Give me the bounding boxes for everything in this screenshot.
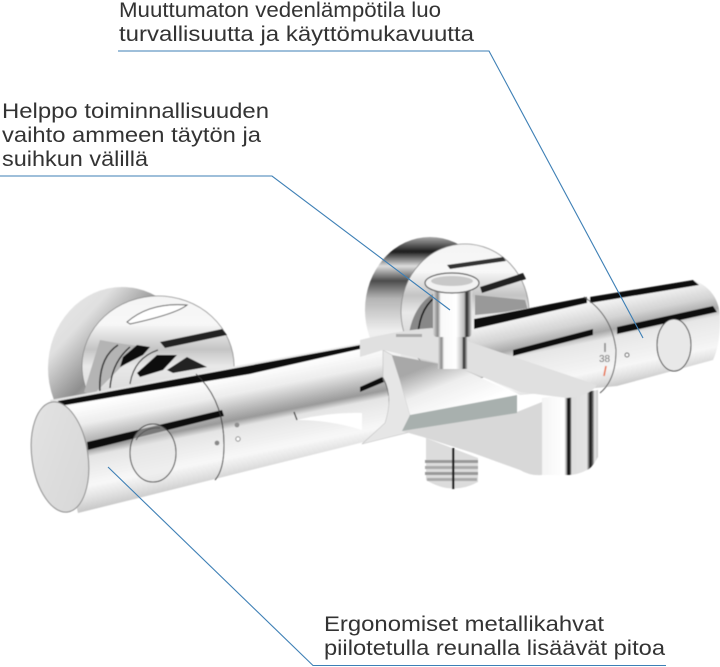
leader line: temperature	[118, 51, 643, 338]
callout text: diverter	[2, 100, 269, 171]
spout body	[362, 350, 598, 475]
callout text: diverter: Helppo toiminnallisuuden	[2, 100, 269, 123]
leader line: diverter	[0, 176, 450, 310]
right wall plate	[365, 237, 529, 383]
metal handle	[657, 319, 691, 371]
dark reflections	[474, 297, 587, 329]
callout text: temperature: turvallisuutta ja käyttömukavuutta	[119, 23, 474, 46]
metal handle	[130, 424, 176, 482]
left wall plate	[48, 287, 234, 449]
spout top surface	[360, 328, 597, 398]
callout text: handles: piilotetulla reunalla lisäävät pitoa	[324, 637, 665, 660]
middle dark reflection	[87, 410, 224, 450]
callout text: handles	[324, 613, 665, 660]
tube end near spout	[360, 377, 390, 423]
spout upper chrome	[392, 355, 518, 415]
diverter stem	[425, 273, 479, 369]
spout grey band	[402, 395, 517, 431]
left thermostat tube	[25, 336, 404, 516]
upper dark reflection	[58, 345, 360, 406]
callout text: temperature	[119, 0, 474, 46]
faucet illustration	[25, 237, 720, 516]
right thermostat tube	[470, 280, 720, 395]
callout text: diverter: vaihto ammeen täytön ja	[2, 124, 261, 147]
temperature dots	[215, 423, 240, 445]
temperature scale 38	[599, 343, 611, 376]
temperature scale 38: 38	[599, 354, 611, 365]
diverter knob cap	[425, 273, 479, 293]
outlet connector	[425, 438, 478, 489]
spout lower face	[402, 402, 542, 475]
spout end cylinder	[542, 390, 598, 475]
leader line: handles	[108, 467, 666, 666]
slot mark	[294, 412, 362, 430]
temperature ring	[584, 297, 616, 393]
small marker	[625, 353, 629, 357]
temperature ring	[196, 374, 224, 480]
callout text: diverter: suihkun välillä	[2, 148, 148, 171]
spout corner	[362, 350, 410, 444]
logo mark	[396, 334, 422, 337]
end cap	[25, 398, 95, 516]
callout text: handles: Ergonomiset metallikahvat	[324, 613, 604, 636]
